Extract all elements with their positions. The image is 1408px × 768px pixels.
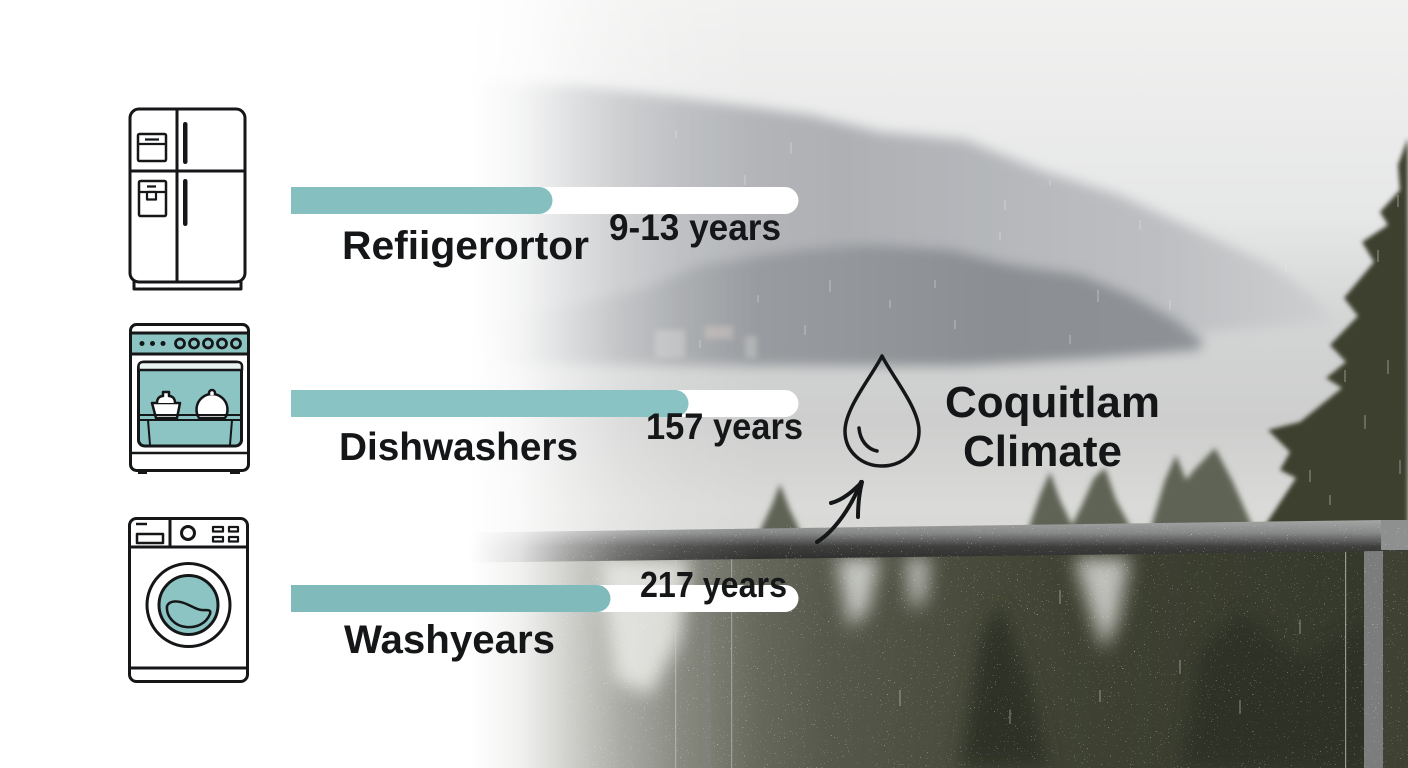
bar fill: washing machine xyxy=(291,585,610,612)
row: refrigerator xyxy=(130,109,798,289)
icon: refrigerator xyxy=(130,109,245,289)
bar track: refrigerator xyxy=(291,187,798,214)
far hillside xyxy=(440,80,1330,345)
bar track: washing machine xyxy=(291,585,798,612)
value: dishwashers: 157 years xyxy=(646,406,803,447)
distant treetops behind rail xyxy=(758,448,1254,535)
bar fill: dishwashers xyxy=(291,390,688,417)
balcony rail xyxy=(440,520,1408,563)
label: dishwashers: Dishwashers xyxy=(339,426,578,469)
right-hand conifer xyxy=(1262,138,1408,530)
climate heading: Coquitlam xyxy=(945,378,1160,427)
forest seen through the glass xyxy=(440,540,1408,768)
near wooded island xyxy=(500,245,1204,366)
label: refrigerator: Refiigerortor xyxy=(342,224,589,268)
bar track: dishwashers xyxy=(291,390,798,417)
climate callout xyxy=(817,356,1160,542)
icon: washing machine xyxy=(130,518,248,682)
shoreline buildings xyxy=(655,326,757,358)
white fade panel on the left xyxy=(0,0,760,768)
rain streaks xyxy=(676,130,1400,724)
label: washing machine: Washyears xyxy=(344,618,555,662)
value: washing machine: 217 years xyxy=(640,564,787,605)
row: washing machine xyxy=(130,518,798,682)
icon: dishwasher xyxy=(130,324,248,474)
value: refrigerator: 9-13 years xyxy=(609,207,781,248)
row: dishwashers xyxy=(130,324,803,474)
climate callout: Climate xyxy=(963,427,1122,476)
blurred trees through the glass xyxy=(600,558,1408,768)
icon: water drop xyxy=(845,356,919,466)
glass panel edges and post xyxy=(675,548,1408,768)
arrow pointing to drop xyxy=(817,482,862,542)
bar fill: refrigerator xyxy=(291,187,552,214)
water droplets xyxy=(560,525,1408,768)
